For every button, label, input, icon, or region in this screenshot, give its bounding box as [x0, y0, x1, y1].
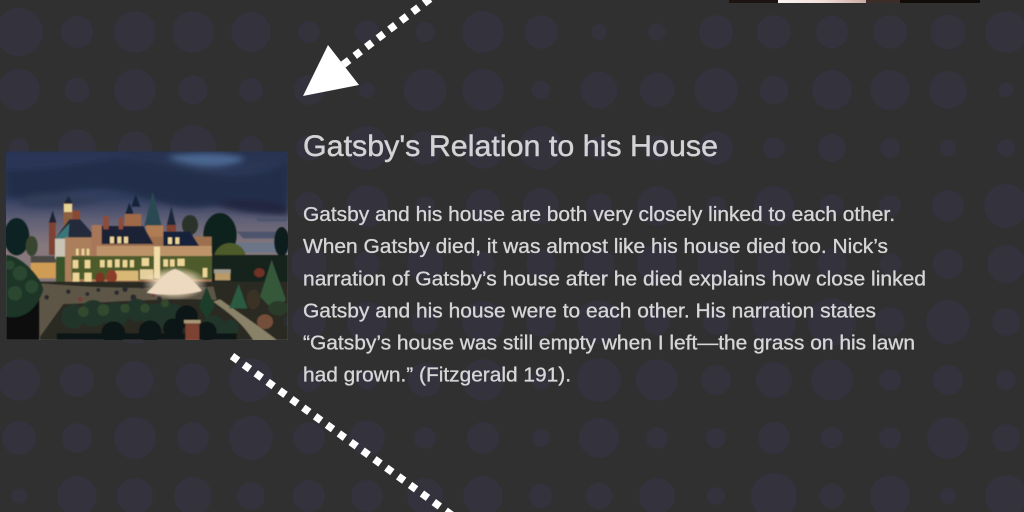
driveway and ground: [40, 282, 288, 340]
body paragraph: narration of Gatsby’s house after he died explains how close linked: [303, 268, 926, 290]
central towers and roof: [125, 203, 134, 215]
fountain: [142, 267, 208, 300]
dotted line leaving the photo: [232, 356, 470, 512]
foreground trees: [61, 299, 239, 338]
main building: [101, 236, 213, 282]
body paragraph: “Gatsby’s house was still empty when I left—the grass on his lawn: [303, 332, 915, 355]
body paragraph: When Gatsby died, it was almost like his house died too. Nick’s: [303, 235, 888, 258]
body paragraph: had grown.” (Fitzgerald 191).: [303, 364, 571, 387]
body paragraph: Gatsby and his house are both very closely linked to each other.: [303, 203, 895, 226]
ivy and lit windows: [72, 256, 212, 279]
side pavilion: [215, 272, 230, 280]
dotted arrow pointing to the heading: [303, 0, 442, 96]
red autumn trees: [95, 272, 105, 284]
photo: Gatsby's mansion at dusk: [4, 151, 289, 345]
left wing: [31, 257, 56, 278]
background trees: [203, 213, 237, 257]
heading: Gatsby's Relation to his House: [303, 130, 718, 163]
body paragraph: Gatsby and his house were to each other. His narration states: [303, 300, 876, 322]
far towers: [49, 222, 56, 255]
cropped photo at top edge: [729, 0, 980, 3]
left trees: [6, 300, 39, 340]
body paragraph: [303, 203, 926, 387]
